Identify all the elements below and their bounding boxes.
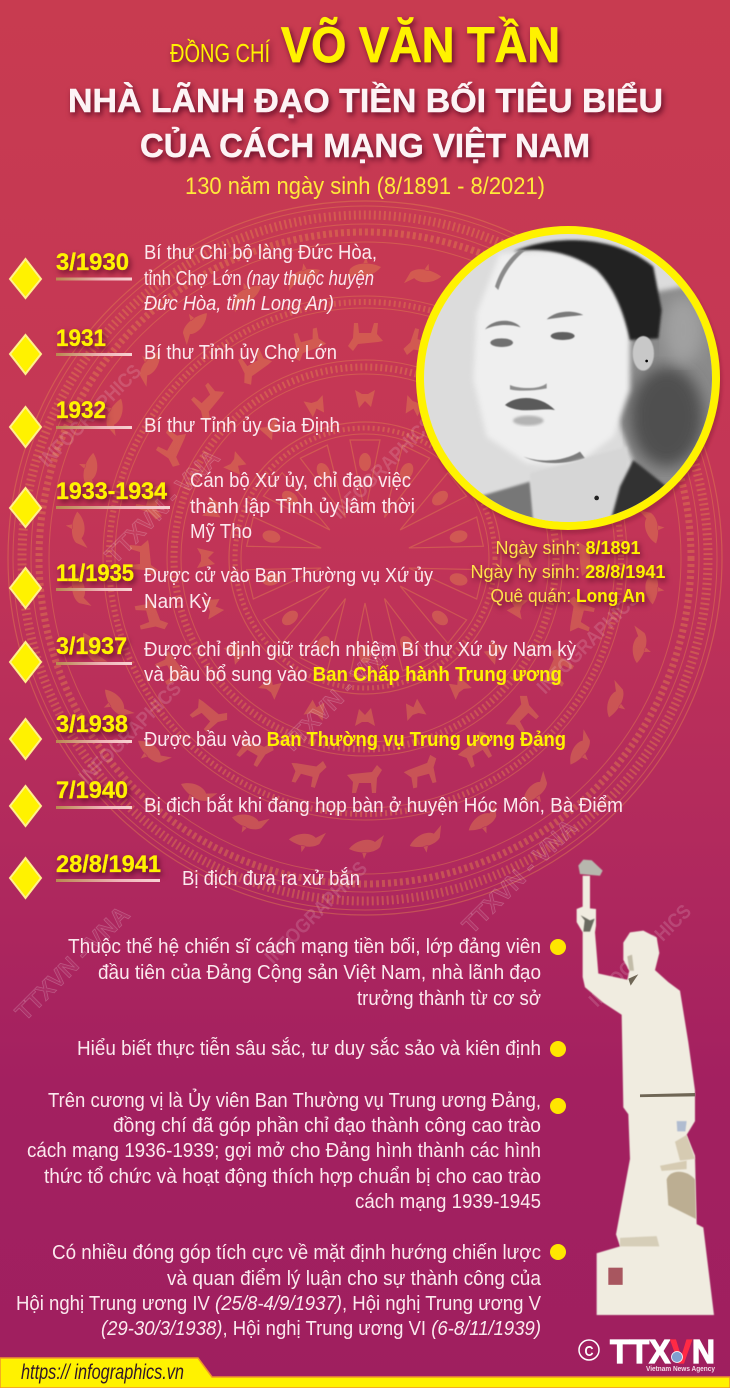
assessment 1 — [68, 936, 566, 1010]
entry 1933-1934: 1933-1934 — [56, 478, 168, 505]
watermarks: INFOGRAPHICS — [75, 678, 186, 789]
entry 7/1940: 7/1940 — [56, 777, 128, 804]
portrait shadow — [418, 230, 722, 534]
entry 28/8/1941: 28/8/1941 — [56, 851, 161, 878]
assessment 1: Thuộc thế hệ chiến sĩ cách mạng tiền bối, lớp đảng viên — [68, 936, 541, 958]
entry 11/1935: 11/1935 — [56, 560, 134, 587]
watermarks — [10, 361, 696, 1026]
logo: C — [584, 1343, 594, 1360]
footer url: https:// infographics.vn — [21, 1361, 184, 1384]
entry 11/1935: Được cử vào Ban Thường vụ Xứ ủy — [144, 565, 433, 587]
assessment 3: cách mạng 1939-1945 — [355, 1191, 541, 1213]
entry 1932 — [10, 397, 340, 447]
entry 3/1937: Được chỉ định giữ trách nhiệm Bí thư Xứ ủy Nam kỳ — [144, 639, 576, 661]
bronze drum pattern — [0, 152, 730, 915]
watermarks: TTXVN - VNA — [457, 814, 582, 939]
death date: Ngày hy sinh: 28/8/1941 — [470, 561, 666, 582]
entry 3/1930: Đức Hòa, tỉnh Long An) — [144, 293, 334, 315]
entry 7/1940: Bị địch bắt khi đang họp bàn ở huyện Hóc Môn, Bà Điểm — [144, 794, 623, 817]
title: line 2: NHÀ LÃNH ĐẠO TIỀN BỐI TIÊU BIỂU — [68, 81, 663, 119]
watermarks: INFOGRAPHICS — [585, 901, 696, 1012]
biographical facts — [470, 537, 666, 606]
entry 1932: Bí thư Tỉnh ủy Gia Định — [144, 415, 340, 437]
assessment 4: Có nhiều đóng góp tích cực về mặt định hướng chiến lược — [52, 1242, 541, 1264]
birth date: Ngày sinh: 8/1891 — [496, 537, 640, 558]
assessment 3: cách mạng 1936-1939; gợi mở cho Đảng hình thành các hình — [27, 1140, 541, 1162]
copyright mark — [579, 1340, 599, 1360]
entry 1933-1934: Mỹ Tho — [190, 521, 252, 543]
portrait — [416, 226, 722, 534]
entry 3/1930: Bí thư Chi bộ làng Đức Hòa, — [144, 242, 377, 264]
watermarks: INFOGRAPHICS — [261, 858, 372, 969]
assessment 4: Hội nghị Trung ương IV (25/8-4/9/1937), Hội nghị Trung ương V — [16, 1293, 542, 1315]
title block — [68, 16, 663, 164]
entry 11/1935 — [10, 560, 433, 613]
title: line 3: CỦA CÁCH MẠNG VIỆT NAM — [140, 127, 590, 164]
entry 3/1938 — [10, 711, 566, 759]
entry 1932: 1932 — [56, 397, 106, 424]
assessment 4 — [16, 1242, 566, 1340]
portrait photo — [420, 230, 720, 530]
entry 1933-1934 — [10, 470, 415, 543]
entry 1931: Bí thư Tỉnh ủy Chợ Lớn — [144, 342, 337, 364]
watermarks: INFOGRAPHICS — [328, 413, 439, 524]
globe — [672, 1352, 682, 1362]
logo — [579, 1333, 715, 1373]
subtitle: 130 năm ngày sinh (8/1891 - 8/2021) — [185, 173, 545, 200]
watermarks: TTXVN - VNA — [275, 634, 400, 759]
entry 3/1938: Được bầu vào Ban Thường vụ Trung ương Đảng — [144, 729, 566, 751]
assessment 3: đồng chí đã góp phần chỉ đạo thành công cao trào — [113, 1115, 541, 1137]
entry 28/8/1941 — [10, 851, 360, 898]
statue — [577, 860, 714, 1315]
agency wordmark: TTXVN — [610, 1333, 715, 1370]
title: name: VÕ VĂN TẦN — [281, 16, 560, 73]
assessment 1: trưởng thành từ cơ sở — [357, 988, 541, 1010]
watermarks: TTXVN - VNA — [100, 444, 225, 569]
assessment 3 — [27, 1088, 566, 1213]
hometown: Quê quán: Long An — [490, 585, 646, 606]
watermarks: TTXVN - VNA — [10, 901, 135, 1026]
entry 28/8/1941: Bị địch đưa ra xử bắn — [182, 867, 360, 890]
assessment 3: thức tổ chức và hoạt động thích hợp chuẩn bị cho cao trào — [44, 1166, 541, 1188]
assessment 1: đầu tiên của Đảng Cộng sản Việt Nam, nhà lãnh đạo — [98, 962, 541, 984]
entry 7/1940 — [10, 777, 623, 826]
assessment 4: và quan điểm lý luận cho sự thành công của — [167, 1268, 542, 1290]
assessment 2: Hiểu biết thực tiễn sâu sắc, tư duy sắc sảo và kiên định — [77, 1037, 541, 1060]
portrait ring — [416, 226, 720, 530]
agency tagline: Vietnam News Agency — [646, 1366, 715, 1373]
timeline — [10, 242, 623, 898]
watermarks: INFOGRAPHICS — [35, 361, 146, 472]
footer — [0, 1358, 730, 1388]
entry 3/1930: tỉnh Chợ Lớn (nay thuộc huyện — [144, 268, 374, 290]
entry 3/1937 — [10, 633, 576, 686]
footer bar — [0, 1358, 730, 1388]
assessment list — [16, 936, 566, 1340]
entry 3/1930: 3/1930 — [56, 249, 129, 276]
watermarks: INFOGRAPHICS — [533, 588, 644, 699]
entry 3/1937: và bầu bổ sung vào Ban Chấp hành Trung ương — [144, 664, 562, 686]
entry 3/1937: 3/1937 — [56, 633, 127, 660]
entry 1933-1934: thành lập Tỉnh ủy lâm thời — [190, 496, 415, 518]
entry 3/1938: 3/1938 — [56, 711, 128, 738]
title: prefix: ĐỒNG CHÍ — [170, 38, 271, 68]
entry 1933-1934: Cán bộ Xứ ủy, chỉ đạo việc — [190, 470, 411, 492]
entry 3/1930 — [10, 242, 377, 315]
assessment 4: (29-30/3/1938), Hội nghị Trung ương VI (6-8/11/1939) — [101, 1318, 541, 1340]
entry 1931 — [10, 325, 337, 374]
entry 11/1935: Nam Kỳ — [144, 591, 211, 613]
assessment 3: Trên cương vị là Ủy viên Ban Thường vụ Trung ương Đảng, — [48, 1088, 541, 1112]
entry 1931: 1931 — [56, 325, 106, 352]
